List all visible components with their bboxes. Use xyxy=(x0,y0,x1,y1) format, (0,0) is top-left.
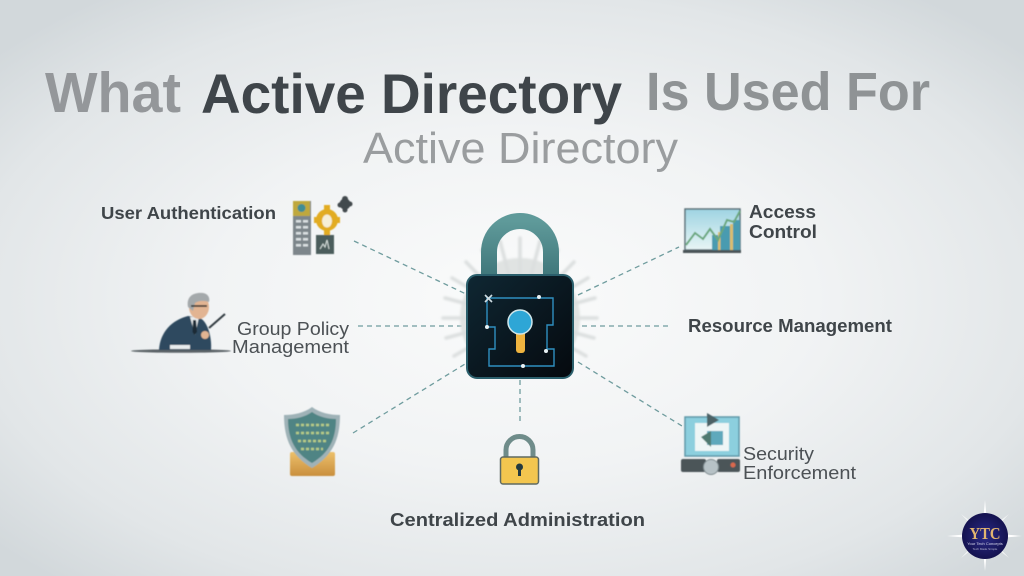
hand and pen xyxy=(201,331,209,339)
title xyxy=(45,61,930,125)
label: User Authentication: User Authentication xyxy=(101,203,276,223)
desk shadow xyxy=(131,349,231,353)
label: Group Policy Management xyxy=(232,318,350,357)
logo: YTC badge xyxy=(947,500,1022,571)
subtitle: Active Directory xyxy=(363,124,678,173)
label: Access Control: Control xyxy=(749,221,817,242)
keyhole xyxy=(516,330,525,353)
label: Group Policy Management: Group Policy xyxy=(237,318,350,339)
icon: security console xyxy=(681,413,740,474)
icon: yellow padlock xyxy=(500,436,538,484)
dashed connector lines xyxy=(353,241,682,433)
title: Is Used For xyxy=(646,62,930,122)
circuit outline xyxy=(487,298,554,366)
label: Security Enforcement: Enforcement xyxy=(743,462,856,483)
gear halo behind padlock xyxy=(443,238,597,378)
logo: YTC badge: Tech Made Simple xyxy=(973,547,998,551)
shackle xyxy=(489,221,551,280)
label: Resource Management: Resource Management xyxy=(688,316,892,336)
label: Centralized Administration: Centralized Administration xyxy=(390,509,645,530)
title: Active Directory xyxy=(201,62,622,125)
label: Security Enforcement xyxy=(743,443,856,483)
label: Group Policy Management: Management xyxy=(232,336,349,357)
logo: YTC badge: Your Tech Concepts xyxy=(967,541,1003,546)
icon: user authentication xyxy=(293,196,352,255)
head xyxy=(189,295,209,319)
label: Access Control xyxy=(749,201,817,242)
lock body xyxy=(467,275,573,378)
icon: businessman at desk xyxy=(131,293,231,353)
logo: YTC badge: YTC xyxy=(970,524,1000,543)
icon: shield on gold base xyxy=(284,407,340,476)
label: Security Enforcement: Security xyxy=(743,443,815,464)
torso xyxy=(159,316,211,350)
icon: growth chart xyxy=(683,209,741,253)
title: What xyxy=(45,61,181,125)
label: Access Control: Access xyxy=(749,201,816,222)
central padlock icon xyxy=(443,221,597,378)
